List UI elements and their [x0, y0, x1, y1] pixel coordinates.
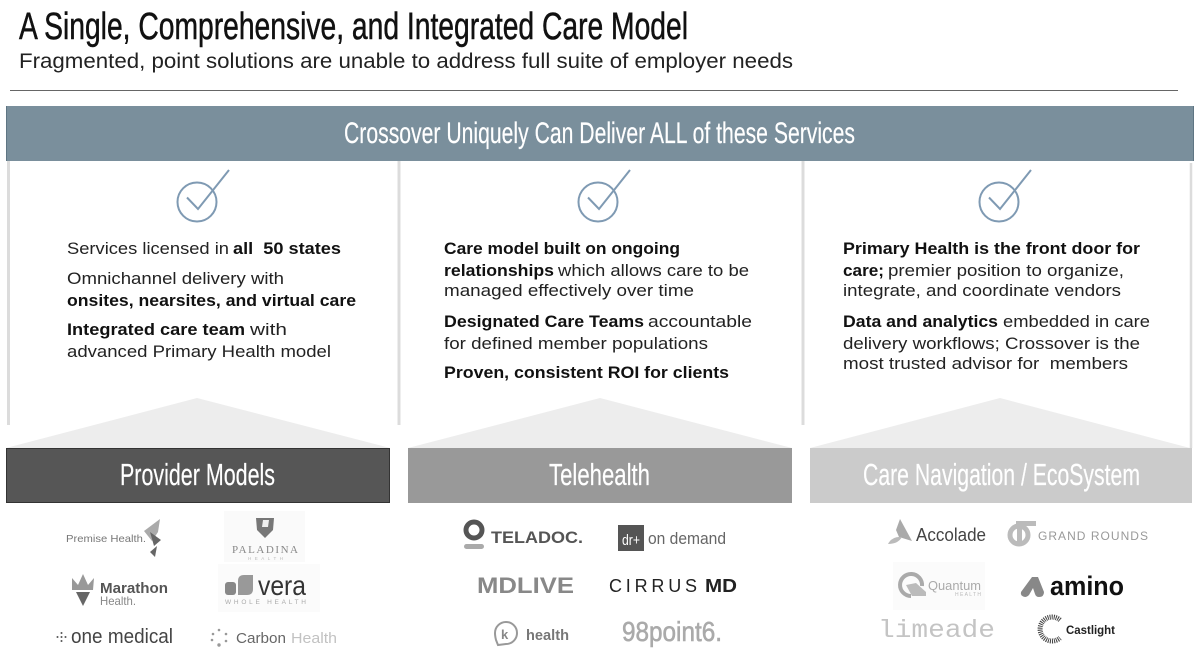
logo: Castlight: Castlight [1066, 623, 1115, 637]
text block: provider benefits: Services licensed in [67, 239, 229, 258]
logo: Marathon Health: Health. [100, 594, 136, 608]
logo: dr on demand [618, 525, 726, 551]
text block: care navigation benefits: Primary Health is the front door for [843, 239, 1140, 258]
text block: provider benefits [67, 239, 356, 361]
logo: Grand Rounds [1010, 521, 1148, 544]
logo: Accolade: Accolade [916, 525, 986, 545]
heading: provider models: Provider Models [120, 457, 275, 492]
text block: telehealth benefits: relationships [444, 261, 554, 280]
logo: Vera Whole Health: vera [258, 570, 306, 601]
logo: Quantum Health: Quantum [928, 578, 981, 593]
text block: care navigation benefits: delivery workflows; Crossover is the [843, 334, 1140, 353]
logo: dr on demand: dr+ [622, 532, 640, 549]
logo: CirrusMD [609, 576, 737, 596]
logo: Accolade [888, 519, 986, 545]
text block: telehealth benefits: managed effectively over time [444, 281, 694, 300]
panel: provider models [6, 170, 390, 648]
panel: telehealth [408, 170, 792, 647]
pointer triangle [408, 398, 792, 448]
title: A Single, Comprehensive, and Integrated Care Model [19, 6, 688, 48]
logo: K Health: health [526, 627, 569, 644]
heading: provider models [6, 448, 390, 502]
heading: telehealth: Telehealth [549, 457, 650, 492]
text block: telehealth benefits: accountable [648, 312, 752, 331]
text block: care navigation benefits: integrate, and coordinate vendors [843, 281, 1121, 300]
text block: provider benefits: onsites, nearsites, and virtual care [67, 291, 356, 310]
pointer triangle [810, 398, 1190, 448]
logo: Carbon Health: Health [291, 630, 337, 647]
text block: care navigation benefits: embedded in care [1003, 312, 1150, 331]
logo: Teladoc: TELADOC. [491, 528, 583, 547]
banner: Crossover Uniquely Can Deliver ALL of these Services [344, 117, 855, 150]
logo: Vera Whole Health: WHOLE HEALTH [225, 599, 306, 606]
logo: Paladina Health: HEALTH [248, 556, 283, 561]
logo: Grand Rounds: GRAND ROUNDS [1038, 529, 1148, 543]
subtitle: Fragmented, point solutions are unable to address full suite of employer needs [19, 50, 793, 73]
text block: care navigation benefits: care; [843, 261, 884, 280]
logo: Vera Whole Health [218, 564, 320, 612]
text block: provider benefits: advanced Primary Health model [67, 342, 331, 361]
logo: Quantum Health [893, 562, 985, 610]
icon: check mark [980, 170, 1031, 222]
text block: provider benefits: with [249, 320, 287, 339]
logo: CirrusMD: MD [705, 576, 737, 596]
pointer triangle [6, 398, 390, 448]
text block: provider benefits: Integrated care team [67, 320, 245, 339]
logo: Amino [1021, 571, 1124, 601]
logo: Quantum Health: HEALTH [955, 592, 981, 598]
logo: Carbon Health: Carbon [236, 630, 286, 647]
logo: Marathon Health: Marathon [100, 580, 168, 597]
banner [6, 106, 1194, 161]
logo: Premise Health: Premise Health. [66, 533, 146, 545]
logo: Premise Health [66, 519, 161, 557]
logo: One Medical: one medical [71, 626, 173, 648]
logo: Castlight [1040, 617, 1115, 641]
logo: 98point6: 98point6. [622, 616, 722, 647]
logo: Paladina Health [224, 511, 305, 562]
icon: check mark [178, 170, 229, 222]
logo: dr on demand: on demand [648, 529, 726, 548]
text block: telehealth benefits: Care model built on ongoing [444, 239, 680, 258]
text block: care navigation benefits [843, 239, 1150, 373]
logo: MDLive: MDLIVE [477, 573, 574, 598]
logo: Marathon Health [72, 574, 168, 608]
logo: Carbon Health [211, 629, 337, 647]
text block: telehealth benefits [444, 239, 752, 382]
text block: care navigation benefits: premier position to organize, [888, 261, 1124, 280]
logo: K Health [495, 622, 569, 645]
panel: care navigation [810, 170, 1192, 645]
icon: check mark [578, 170, 630, 222]
heading: telehealth [408, 448, 792, 503]
text block: provider benefits: all 50 states [233, 239, 341, 258]
logo: Teladoc [464, 522, 583, 549]
text block: telehealth benefits: Proven, consistent ROI for clients [444, 363, 729, 382]
logo: K Health: k [501, 627, 509, 642]
text block: care navigation benefits: most trusted advisor for members [843, 354, 1128, 373]
heading: care navigation [810, 448, 1192, 503]
logo: Paladina Health: PALADINA [232, 544, 298, 556]
text block: telehealth benefits: Designated Care Teams [444, 312, 644, 331]
text block: care navigation benefits: Data and analytics [843, 312, 998, 331]
text block: telehealth benefits: for defined member populations [444, 334, 708, 353]
logo: Amino: amino [1050, 571, 1124, 601]
text block: provider benefits: Omnichannel delivery with [67, 269, 284, 288]
text block: telehealth benefits: which allows care to be [557, 261, 749, 280]
logo: Limeade: limeade [878, 616, 995, 645]
logo: CirrusMD: CIRRUS [609, 576, 697, 596]
